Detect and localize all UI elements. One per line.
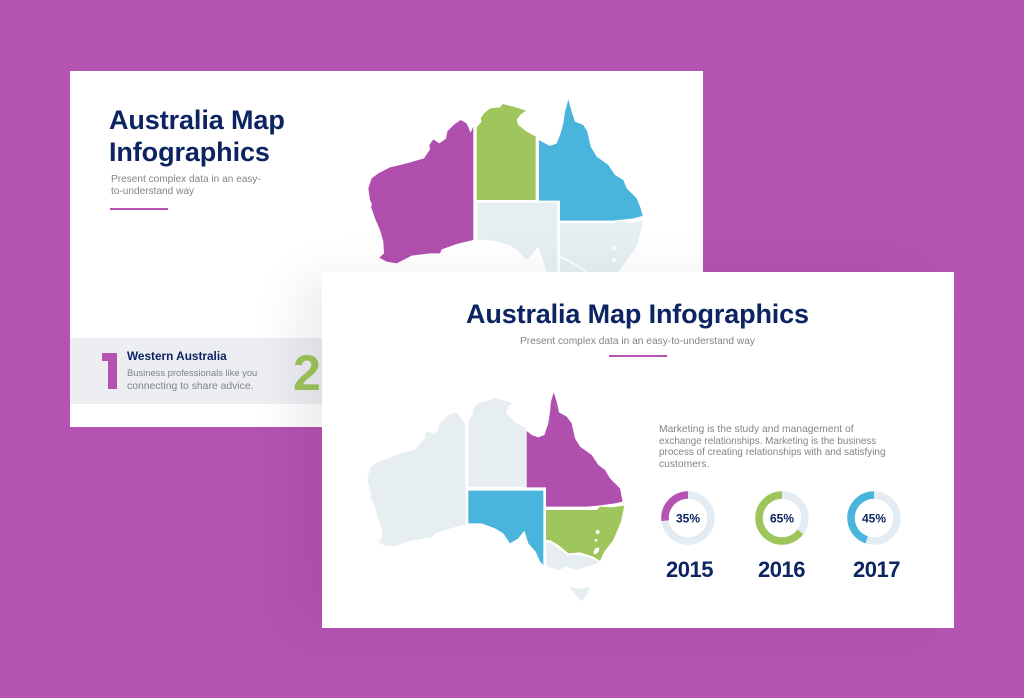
subtitle: Present complex data in an easy-to-understand way bbox=[520, 336, 755, 347]
region description bbox=[127, 367, 257, 392]
slide card: back bbox=[70, 71, 703, 427]
Western Australia bbox=[368, 120, 473, 263]
subtitle bbox=[111, 174, 261, 196]
donut: 2015 bbox=[661, 491, 715, 545]
donut: 2017: 45% bbox=[862, 511, 886, 525]
body text: customers. bbox=[659, 458, 709, 470]
New South Wales bbox=[546, 506, 624, 561]
donut: 2015: 35% bbox=[676, 511, 701, 525]
region description: Business professionals like you bbox=[127, 367, 257, 378]
Western Australia bbox=[367, 412, 465, 547]
donut: 2016: 65% bbox=[770, 511, 794, 525]
Northern Territory bbox=[468, 398, 526, 487]
body text bbox=[659, 424, 885, 470]
subtitle: Present complex data in an easy- bbox=[111, 174, 261, 185]
Queensland bbox=[539, 99, 643, 221]
Victoria bbox=[546, 543, 599, 570]
number 1: 1 bbox=[97, 340, 128, 402]
legend strip bbox=[70, 338, 322, 404]
Northern Territory bbox=[477, 104, 536, 200]
title: Australia Map bbox=[109, 105, 285, 135]
region heading: Western Australia bbox=[127, 349, 227, 363]
map: front slide bbox=[368, 392, 624, 601]
title bbox=[109, 105, 285, 167]
body text: Marketing is the study and management of bbox=[659, 424, 854, 435]
accent line bbox=[609, 355, 667, 357]
number 2: 2 bbox=[293, 345, 321, 401]
year 2017: 2017 bbox=[853, 557, 900, 582]
slide card: front bbox=[322, 272, 954, 628]
number 1 bbox=[102, 353, 117, 389]
body text: process of creating relationships with and satisfying bbox=[659, 447, 885, 458]
donut: 2017 bbox=[847, 491, 901, 545]
accent line bbox=[110, 208, 168, 210]
South Australia bbox=[477, 203, 557, 272]
map: back slide bbox=[368, 100, 644, 272]
title: Infographics bbox=[109, 137, 270, 167]
year 2015: 2015 bbox=[666, 557, 713, 582]
South Australia bbox=[468, 491, 543, 565]
subtitle: to-understand way bbox=[111, 186, 194, 196]
donut: 2016 bbox=[755, 491, 809, 545]
New South Wales and Victoria bbox=[560, 220, 643, 272]
region description: connecting to share advice. bbox=[127, 381, 254, 392]
year 2016: 2016 bbox=[758, 557, 805, 582]
body text: exchange relationships. Marketing is the business bbox=[659, 436, 876, 446]
Tasmania bbox=[569, 587, 590, 601]
Queensland bbox=[527, 392, 623, 507]
title: Australia Map Infographics bbox=[466, 299, 809, 329]
